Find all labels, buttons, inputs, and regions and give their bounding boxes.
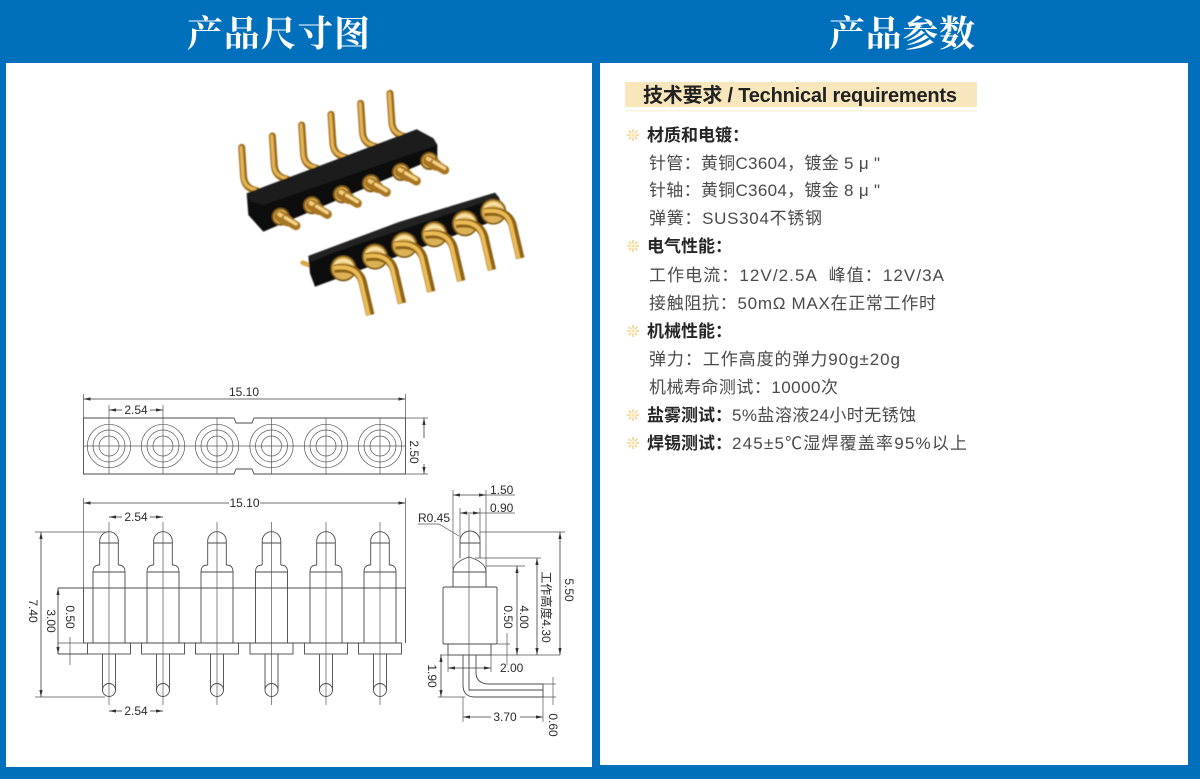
technical drawing: top view: 2.50: [407, 440, 421, 464]
section title band: [625, 82, 977, 112]
spec group: materials and plating: [627, 125, 880, 228]
front connector body: [308, 193, 500, 287]
spec: solder test: 245±5℃湿焊覆盖率95%以上: [732, 434, 967, 453]
technical drawing: top view: 15.10: [229, 385, 259, 399]
spec group: electrical performance: 工作电流：12V/2.5A 峰值：12V/3A: [649, 266, 945, 285]
spec: salt spray test: 5%盐溶液24小时无锈蚀: [732, 406, 916, 425]
panel: product dimensions: [6, 63, 592, 767]
spec: salt spray test: [627, 406, 916, 425]
front connector small pin: [303, 263, 312, 266]
technical drawing: front view: [26, 496, 406, 718]
spec group: mechanical performance: [627, 322, 900, 397]
technical drawing: side view: 0.90: [490, 501, 514, 515]
heading: product parameters: 产品参数: [829, 14, 975, 54]
rear connector body: [247, 129, 437, 232]
technical drawing: front view: 7.40: [26, 599, 40, 623]
technical drawing: side view: R0.45: [418, 511, 450, 525]
technical drawing: side view: 0.50: [501, 605, 515, 629]
spec group: materials and plating: 弹簧：SUS304不锈钢: [649, 209, 822, 228]
technical drawing: side view: 2.00: [500, 661, 524, 675]
technical drawing: side view: 3.70: [493, 710, 517, 724]
panel: product parameters: [600, 63, 1188, 765]
technical drawing: front view: 0.50: [63, 605, 77, 629]
spec group: mechanical performance: 弹力：工作高度的弹力90g±20g: [649, 350, 900, 369]
spec group: mechanical performance: 机械性能：: [647, 322, 732, 341]
technical drawing: top view: 2.54: [124, 403, 148, 417]
spec group: electrical performance: 电气性能：: [647, 237, 732, 256]
technical drawing: side view: 工作高度4.30: [539, 571, 554, 643]
technical drawing: front view: 2.54: [124, 510, 148, 524]
spec: salt spray test: 盐雾测试：: [647, 406, 732, 425]
technical drawing: side view: 1.90: [425, 664, 439, 688]
spec group: materials and plating: 材质和电镀：: [647, 125, 749, 145]
rear connector front pins: [272, 152, 445, 226]
spec group: materials and plating: 针管：黄铜C3604，镀金 5 μ ": [649, 154, 880, 173]
spec: solder test: [627, 434, 967, 453]
technical drawing: side view: 0.60: [546, 713, 560, 737]
spec group: electrical performance: [627, 237, 945, 313]
spec group: mechanical performance: 机械寿命测试：10000次: [649, 378, 838, 397]
technical drawing: front view: 3.00: [44, 609, 58, 633]
heading: product dimensions: 产品尺寸图: [187, 14, 370, 54]
spec group: electrical performance: 接触阻抗：50mΩ MAX在正常工作时: [649, 294, 936, 313]
technical drawing: top view: [84, 385, 428, 474]
spec group: materials and plating: 针轴：黄铜C3604，镀金 8 μ ": [649, 181, 880, 200]
technical drawing: side view: [418, 483, 576, 737]
technical drawing: side view: 4.00: [517, 605, 531, 629]
rear connector pins: [241, 93, 405, 191]
section title band: 技术要求 / Technical requirements: [643, 84, 957, 107]
technical drawing: side view: 1.50: [490, 483, 514, 497]
technical drawing: front view: 2.54: [124, 704, 148, 718]
front connector discs and tails: [330, 199, 520, 315]
technical drawing: side view: 5.50: [562, 578, 576, 602]
technical drawing: front view: 15.10: [229, 496, 260, 510]
product photo: gold pogo pin connectors: [241, 93, 520, 315]
spec: solder test: 焊锡测试：: [647, 434, 732, 453]
